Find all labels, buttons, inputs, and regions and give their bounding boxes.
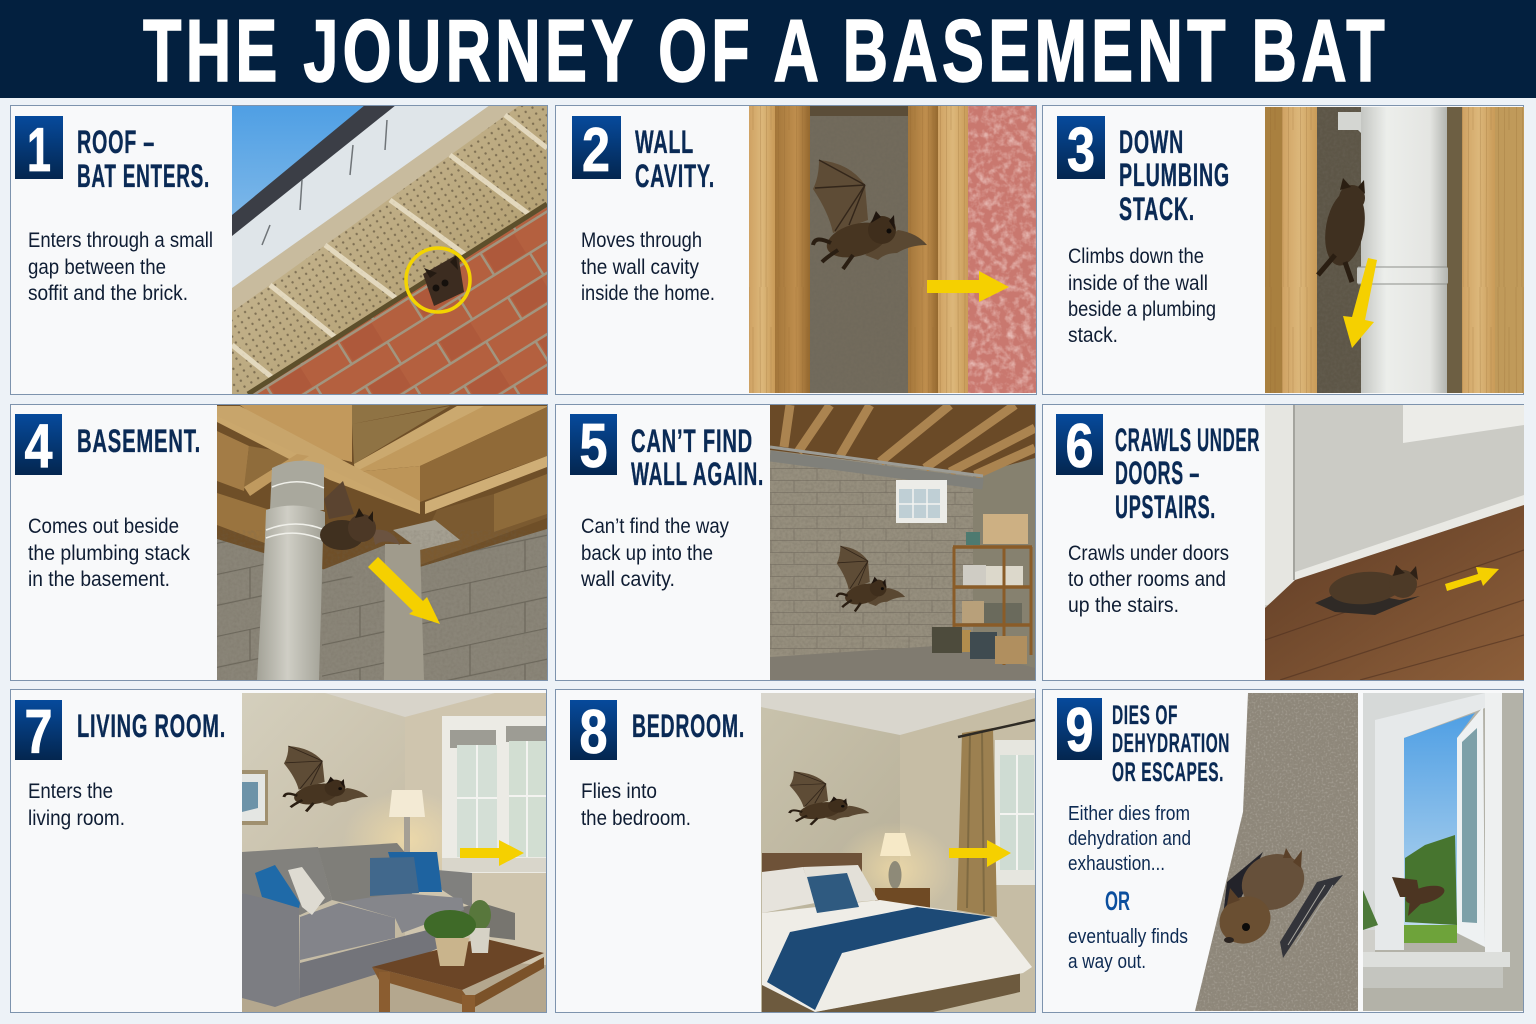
- heading: [635, 124, 715, 194]
- heading: BASEMENT.: [77, 423, 201, 459]
- heading: DEHYDRATION: [1112, 728, 1230, 758]
- heading: UPSTAIRS.: [1115, 489, 1216, 525]
- heading: STACK.: [1119, 191, 1195, 227]
- step number 3: 3: [1067, 116, 1095, 185]
- heading: OR ESCAPES.: [1112, 757, 1224, 787]
- body text: [580, 515, 729, 591]
- icon: open casement: [1457, 707, 1485, 947]
- scene: open window escape: [1363, 693, 1523, 1011]
- icon: flying bat: [837, 546, 905, 611]
- arrow: downward: [1343, 258, 1377, 348]
- body text: exhaustion...: [1068, 853, 1165, 875]
- heading: DOWN: [1119, 124, 1184, 160]
- heading: [631, 423, 764, 492]
- icon: bed: [762, 853, 1032, 1012]
- icon: flying bat: [284, 746, 368, 811]
- body text: the plumbing stack: [28, 542, 190, 565]
- body text: Comes out beside: [28, 515, 179, 538]
- body text: Can’t find the way: [581, 515, 729, 538]
- body text: Crawls under doors: [1068, 542, 1229, 565]
- panel: step 7 living room: [10, 690, 546, 1012]
- panel: step 3 plumbing stack: [1042, 106, 1524, 394]
- icon: bat peeking from gap: [423, 254, 464, 306]
- body text: back up into the: [581, 542, 713, 565]
- body text: Either dies from: [1068, 803, 1190, 825]
- scene: door and wood floor: [1265, 405, 1524, 680]
- body text: up the stairs.: [1068, 594, 1179, 617]
- icon: window: [442, 716, 546, 873]
- icon: sill plant: [1363, 890, 1378, 952]
- icon: floor lamp: [389, 790, 425, 856]
- scene: unfinished basement room: [770, 405, 1035, 680]
- icon: flying bat: [813, 160, 927, 269]
- body text: soffit and the brick.: [28, 282, 188, 305]
- body text: gap between the: [28, 256, 166, 279]
- scene: plumbing stack in wall: [1265, 107, 1524, 393]
- body text: Climbs down the: [1068, 245, 1204, 268]
- arrow: toward stairs: [1445, 567, 1499, 591]
- panel: step 9 dies or escapes: [1042, 690, 1524, 1012]
- step number 9: 9: [1066, 696, 1094, 765]
- arrow: toward window: [949, 840, 1011, 867]
- panel: step 6 crawls under doors: [1042, 404, 1524, 680]
- icon: picture frame: [242, 770, 268, 825]
- panel: step 2 wall cavity: [556, 106, 1036, 394]
- heading: CRAWLS UNDER: [1115, 422, 1260, 458]
- body text: dehydration and: [1068, 828, 1191, 850]
- OR divider: OR: [1105, 886, 1130, 916]
- body text: [28, 229, 213, 305]
- step number 7: 7: [24, 698, 52, 767]
- icon: yellow highlight circle: [406, 248, 470, 312]
- heading: [77, 124, 210, 194]
- panel: step 4 basement: [10, 404, 548, 680]
- scene: soffit and brick wall: [232, 106, 547, 394]
- body text: the wall cavity: [581, 256, 699, 279]
- body text: [28, 780, 125, 830]
- scene: living room: [242, 693, 546, 1012]
- body text: [1068, 245, 1216, 347]
- heading: [1115, 422, 1260, 525]
- panel: step 8 bedroom: [556, 690, 1036, 1012]
- heading: LIVING ROOM.: [77, 708, 226, 744]
- icon: hanging bat: [320, 481, 400, 550]
- body text: wall cavity.: [580, 568, 675, 591]
- arrow: toward bedroom: [460, 840, 524, 866]
- heading: [1119, 124, 1230, 227]
- heading: CAVITY.: [635, 158, 715, 194]
- body text: Moves through: [581, 229, 702, 252]
- heading: ROOF –: [77, 124, 155, 160]
- closing text: a way out.: [1068, 951, 1146, 973]
- icon: ottoman: [457, 903, 515, 940]
- heading: WALL: [635, 124, 694, 160]
- panel: step 5 cannot find wall: [556, 404, 1036, 680]
- heading: DOORS –: [1115, 455, 1200, 491]
- scene: basement joists and pipes: [217, 405, 547, 680]
- step number 5: 5: [580, 412, 608, 481]
- heading: CAN’T FIND: [631, 423, 753, 459]
- body text: [1068, 542, 1229, 617]
- body text: Enters through a small: [28, 229, 213, 252]
- body text: in the basement.: [28, 568, 170, 591]
- body text: to other rooms and: [1068, 568, 1226, 591]
- heading: BAT ENTERS.: [77, 158, 210, 194]
- closing text: [1068, 926, 1188, 973]
- body text: [581, 780, 691, 830]
- scene: wall studs and insulation: [749, 106, 1036, 393]
- step number 4: 4: [24, 412, 53, 481]
- heading: [1112, 700, 1230, 787]
- icon: coffee table with plant: [372, 900, 544, 1012]
- icon: window sill: [1363, 952, 1510, 988]
- body text: stack.: [1068, 324, 1118, 347]
- panel: step 1 roof: [10, 105, 548, 400]
- step number 8: 8: [580, 698, 608, 767]
- step number 2: 2: [582, 116, 610, 185]
- heading: WALL AGAIN.: [631, 456, 764, 492]
- body text: [1068, 803, 1191, 875]
- body text: inside the home.: [581, 282, 715, 305]
- icon: sofa: [242, 843, 472, 1007]
- icon: window and curtain: [957, 720, 1035, 917]
- scene: bat on concrete: [1195, 693, 1358, 1011]
- icon: nightstand: [875, 888, 930, 920]
- heading: PLUMBING: [1119, 157, 1230, 193]
- heading: BEDROOM.: [632, 708, 745, 744]
- arrow: toward insulation: [927, 271, 1009, 302]
- body text: Flies into: [581, 780, 657, 803]
- body text: [581, 229, 715, 305]
- body text: Enters the: [28, 780, 113, 803]
- icon: plumbing pipe: [1338, 107, 1448, 393]
- step number 6: 6: [1066, 412, 1094, 481]
- icon: crawling bat: [1315, 565, 1420, 615]
- icon: fallen bat: [1212, 844, 1343, 958]
- body text: [28, 515, 190, 591]
- body text: beside a plumbing: [1068, 298, 1216, 321]
- closing text: eventually finds: [1068, 926, 1188, 948]
- icon: plumbing pipes: [257, 461, 424, 680]
- icon: storage shelf with boxes: [932, 514, 1032, 665]
- body text: living room.: [28, 807, 125, 830]
- heading: DIES OF: [1112, 700, 1178, 730]
- arrow: toward basement: [368, 557, 440, 624]
- step number 1: 1: [27, 116, 51, 185]
- body text: inside of the wall: [1068, 272, 1208, 295]
- icon: escaping bat: [1392, 877, 1446, 916]
- body text: the bedroom.: [581, 807, 691, 830]
- icon: climbing bat: [1318, 178, 1370, 282]
- icon: basement window: [896, 480, 947, 523]
- scene: bedroom: [761, 693, 1035, 1012]
- icon: bedside lamp: [880, 833, 911, 889]
- icon: flying bat: [790, 771, 869, 825]
